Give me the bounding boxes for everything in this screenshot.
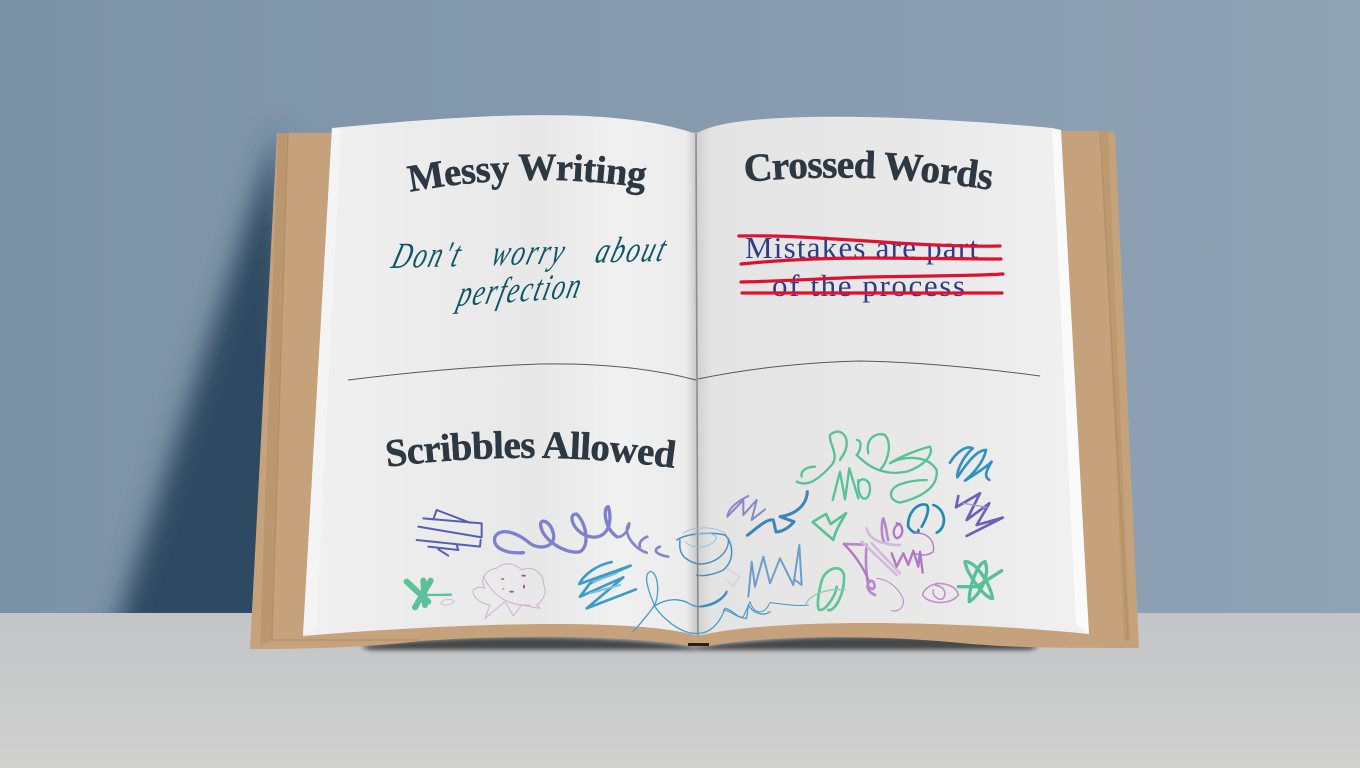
scribble: green check <box>813 513 846 540</box>
gutter <box>696 134 698 636</box>
scribbles: left page <box>407 507 668 618</box>
background wall <box>0 0 1360 613</box>
left page edge <box>303 128 341 636</box>
floor shadow under book <box>360 636 1040 650</box>
handwriting text: Don't worry about perfection: perfection <box>452 266 586 315</box>
scribble: flower face <box>473 564 545 618</box>
scribble: violet spiral <box>923 583 958 603</box>
scribble: blue curls right <box>950 447 992 481</box>
scribbles: right page <box>700 432 1003 617</box>
crossed text: Mistakes are part of the process: Mistakes are part <box>745 230 978 265</box>
crossed text: Mistakes are part of the process <box>745 230 978 303</box>
scribble: spiral bowl <box>677 533 732 576</box>
left page <box>303 115 698 636</box>
heading: Crossed Words: Crossed Words <box>745 150 992 190</box>
scribble: blue trace <box>748 545 802 597</box>
book cover <box>250 131 1139 649</box>
scribble: purple loops <box>495 507 617 553</box>
scribble: blue ribbon curve <box>633 571 770 633</box>
scribble: green flower <box>958 562 1002 602</box>
scribble: green star <box>407 581 431 607</box>
floor <box>0 613 1360 768</box>
divider lines <box>348 361 1040 380</box>
wall shadow behind book <box>112 128 300 640</box>
spine base <box>688 643 709 646</box>
scribble: stacked zigzag box <box>417 510 482 556</box>
scribble: green loop <box>818 568 844 610</box>
scribble: blue zigzag <box>579 562 636 608</box>
scribble: blue loop <box>908 504 944 533</box>
right page <box>696 117 1089 636</box>
book <box>250 115 1139 649</box>
heading: Crossed Words <box>745 150 992 190</box>
right page edge <box>1052 128 1089 634</box>
scribble: violet letters <box>844 518 888 595</box>
heading: Messy Writing: Messy Writing <box>406 154 647 196</box>
heading: Scribbles Allowed: Scribbles Allowed <box>386 430 676 468</box>
scribble: blue-purple wave <box>727 496 765 520</box>
scribbles: gutter crossing <box>633 528 770 633</box>
scribble: violet zigzag <box>956 493 1003 536</box>
crossed text: Mistakes are part of the process: of the process <box>772 268 965 303</box>
scribble: green curls <box>797 432 847 484</box>
handwriting text: Don't worry about perfection <box>387 229 672 315</box>
red strike-through lines <box>739 236 1003 293</box>
handwriting text: Don't worry about perfection: Don't worry about <box>387 229 672 277</box>
